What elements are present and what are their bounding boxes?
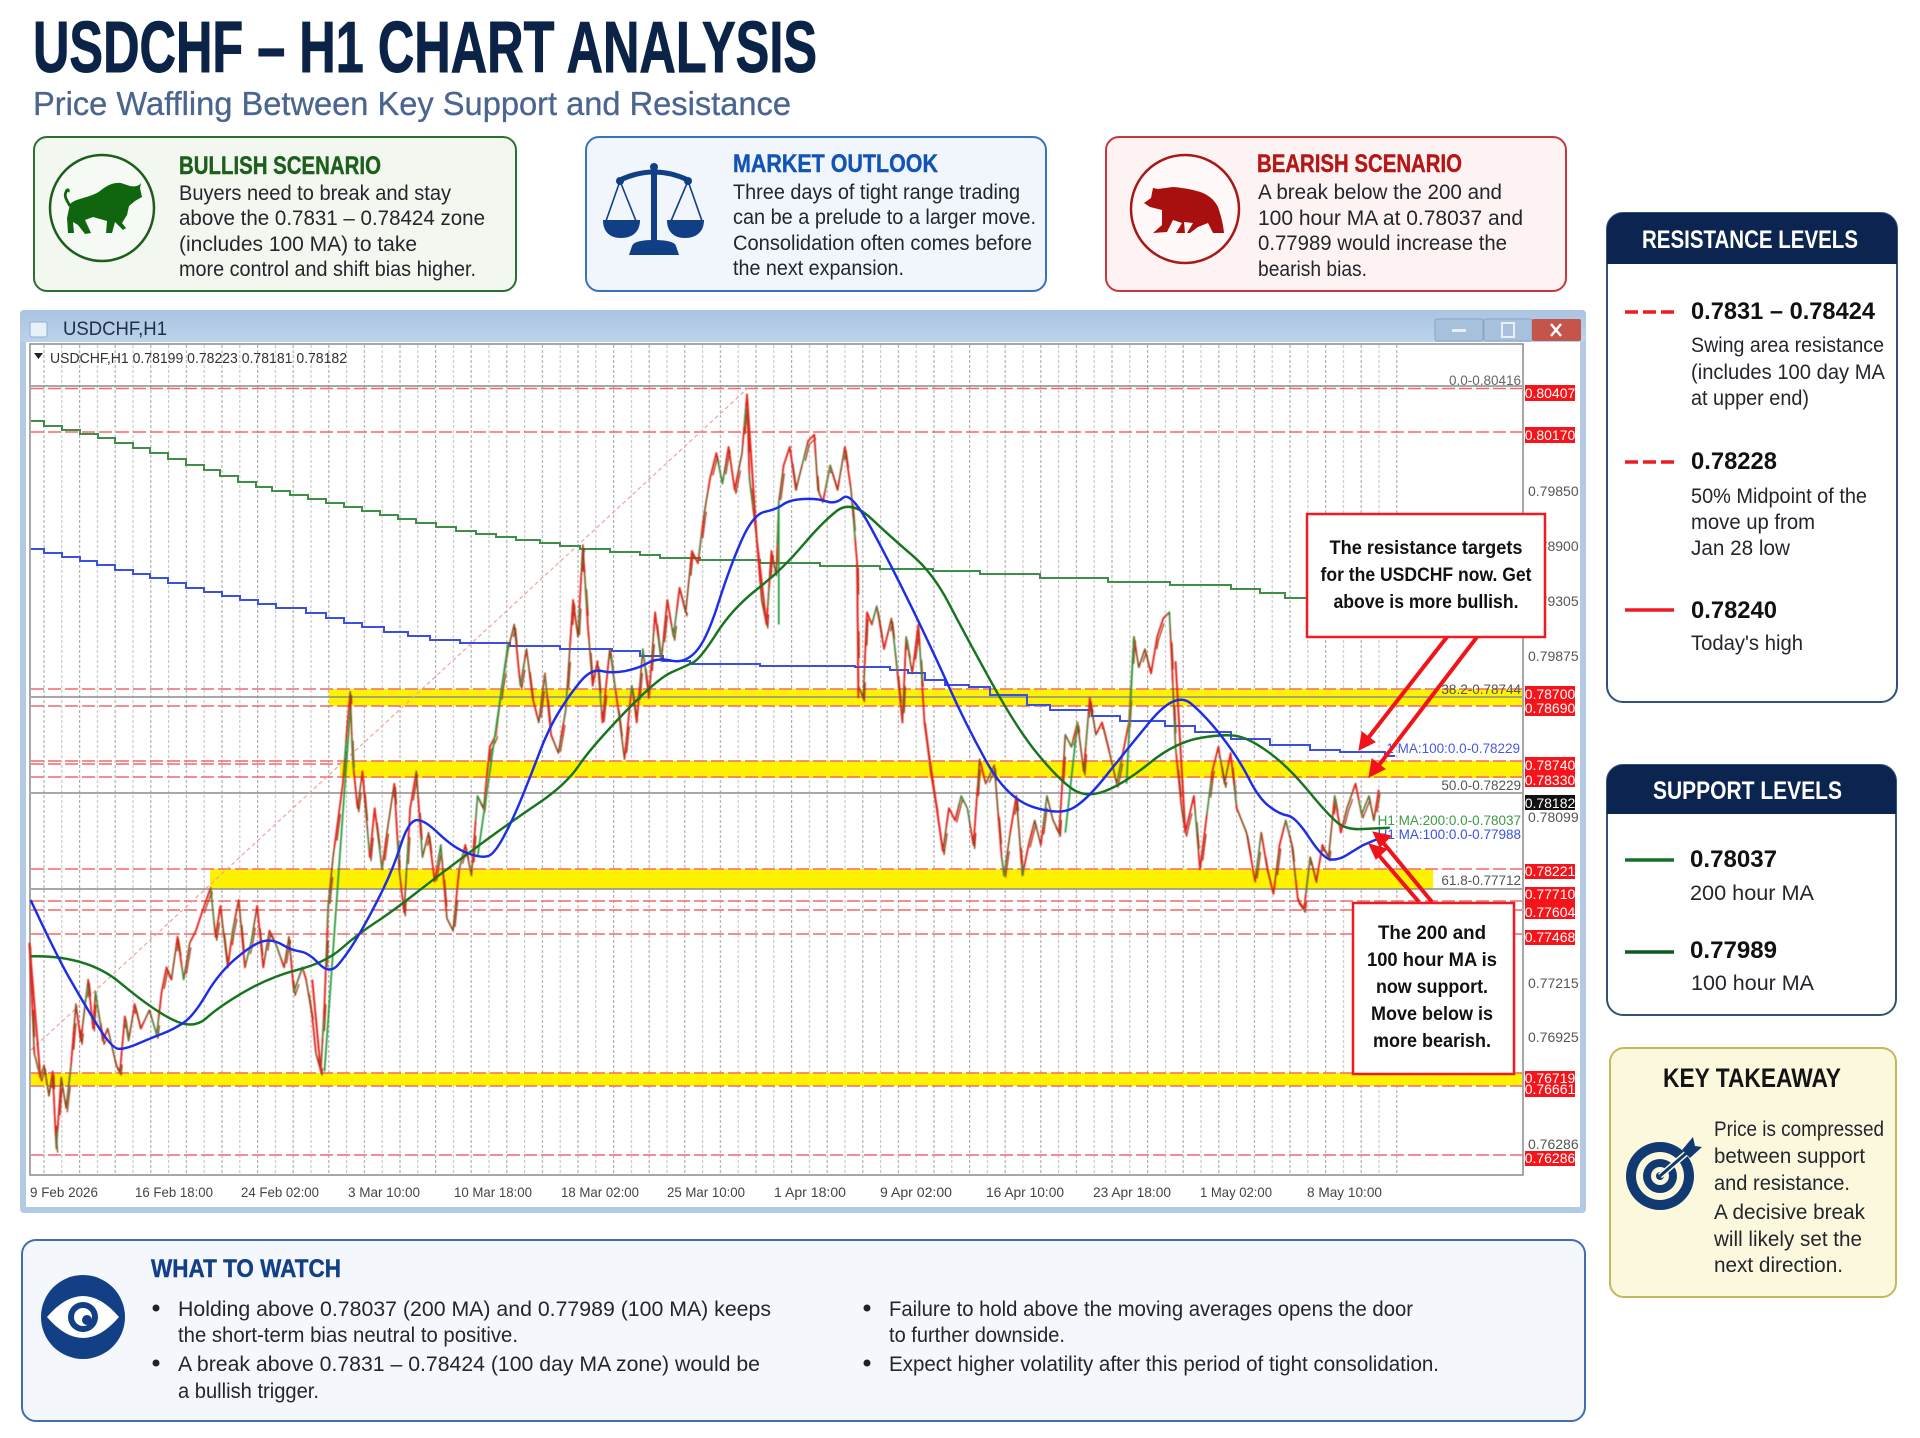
text: bullish body: more control and shift bias higher. — [179, 258, 476, 281]
price axis: 0.76286 — [1525, 1150, 1576, 1166]
text: key takeaway body: between support — [1714, 1145, 1865, 1168]
callout: moving average support — [1353, 903, 1514, 1074]
text: watch list right: Failure to hold above the moving averages opens the door — [889, 1298, 1413, 1321]
level: 0.78240: Today's high — [1691, 632, 1803, 655]
price axis: 0.79850 — [1528, 483, 1579, 499]
text: key takeaway body: and resistance. — [1714, 1172, 1850, 1195]
heading: bearish scenario: BEARISH SCENARIO — [1257, 150, 1462, 178]
chart legend: USDCHF,H1 0.78199 0.78223 0.78181 0.78182 — [50, 350, 347, 367]
text: bullish body: above the 0.7831 – 0.78424 zone — [179, 207, 485, 230]
callout: moving average support: The 200 and — [1378, 923, 1486, 944]
price axis: 0.78900 — [1528, 538, 1579, 554]
level: 0.77989: 0.77989 — [1690, 937, 1777, 964]
price axis: 0.79305 — [1528, 593, 1579, 609]
date axis: 16 Apr 10:00 — [986, 1184, 1064, 1200]
fib and MA labels: H1 MA:200:0.0-0.78037 — [1378, 813, 1521, 828]
level: 0.78037: 200 hour MA — [1690, 882, 1814, 905]
price candles — [29, 394, 1380, 1152]
arrows: moving average support — [1369, 832, 1432, 902]
icon: scales — [603, 163, 704, 255]
fib and MA labels: 1 MA:100:0.0-0.78229 — [1386, 741, 1520, 756]
heading: market outlook: MARKET OUTLOOK — [733, 150, 938, 178]
date axis: 24 Feb 02:00 — [241, 1184, 319, 1200]
level: 0.78037 — [1625, 846, 1814, 905]
text: key takeaway body: next direction. — [1714, 1254, 1843, 1277]
price axis: 0.76925 — [1528, 1029, 1579, 1045]
text: market outlook body — [733, 181, 1036, 280]
dashed level lines — [31, 388, 1522, 1155]
level: 0.7831 – 0.78424: (includes 100 day MA — [1691, 361, 1885, 384]
header: support levels — [1607, 765, 1896, 814]
panel: bullish scenario — [34, 137, 516, 291]
callout: moving average support: 100 hour MA is — [1367, 950, 1497, 971]
heading: what to watch: WHAT TO WATCH — [151, 1255, 341, 1283]
gray fibonacci lines — [31, 386, 1522, 889]
text: key takeaway body — [1713, 1118, 1884, 1277]
arrows: resistance targets — [1359, 637, 1477, 777]
price axis: 0.79875 — [1528, 648, 1579, 664]
date axis: 10 Mar 18:00 — [454, 1184, 532, 1200]
level: 0.77989: 100 hour MA — [1691, 972, 1814, 995]
level: 0.78240 — [1625, 597, 1803, 655]
date axis: 1 Apr 18:00 — [774, 1184, 846, 1200]
text: key takeaway body: Price is compressed — [1714, 1118, 1884, 1141]
long moving averages — [31, 421, 1306, 598]
text: market outlook body: the next expansion. — [733, 257, 904, 280]
price axis: 0.77710 — [1525, 886, 1576, 902]
price axis: 0.78330 — [1525, 772, 1576, 788]
price axis: 0.78740 — [1525, 757, 1576, 773]
window frame — [20, 310, 1586, 1213]
text: watch list left: a bullish trigger. — [178, 1380, 319, 1403]
price axis — [1525, 385, 1579, 1166]
date axis: 9 Feb 2026 — [30, 1184, 98, 1200]
heading: bullish scenario: BULLISH SCENARIO — [179, 152, 381, 180]
yellow support and resistance bands — [31, 689, 1522, 1086]
text: bullish body — [179, 182, 485, 281]
panel: what to watch — [22, 1240, 1585, 1421]
text: key takeaway body: A decisive break — [1714, 1201, 1865, 1224]
callout: moving average support: Move below is — [1371, 1004, 1493, 1025]
date axis: 8 May 10:00 — [1307, 1184, 1382, 1200]
icon: eye — [41, 1275, 125, 1359]
text: bearish body: A break below the 200 and — [1258, 181, 1502, 204]
level: 0.78240: 0.78240 — [1691, 597, 1777, 624]
date axis: 16 Feb 18:00 — [135, 1184, 213, 1200]
fib and MA labels: 0.0-0.80416 — [1449, 373, 1521, 388]
text: market outlook body: Three days of tight range trading — [733, 181, 1020, 204]
price axis: 0.78221 — [1525, 863, 1576, 879]
text: bearish body: 100 hour MA at 0.78037 and — [1258, 207, 1523, 230]
icon: target — [1626, 1137, 1702, 1210]
icon: bull — [50, 155, 154, 261]
panel: support levels — [1607, 765, 1896, 1015]
text: watch list right: to further downside. — [889, 1324, 1065, 1347]
text: bearish body: 0.77989 would increase the — [1258, 232, 1507, 255]
fast moving averages — [31, 497, 1390, 1049]
panel: resistance levels — [1607, 213, 1897, 702]
price axis: 0.77604 — [1525, 904, 1576, 920]
text: bearish body: bearish bias. — [1258, 258, 1367, 281]
date axis: 1 May 02:00 — [1200, 1184, 1272, 1200]
chart plot — [29, 344, 1523, 1175]
level: 0.7831 – 0.78424: Swing area resistance — [1691, 334, 1884, 357]
price axis: 0.80407 — [1525, 385, 1576, 401]
date axis: 18 Mar 02:00 — [561, 1184, 639, 1200]
price axis: 0.77215 — [1528, 975, 1579, 991]
date axis: 25 Mar 10:00 — [667, 1184, 745, 1200]
text: watch list left: A break above 0.7831 – 0.78424 (100 day MA zone) would be — [178, 1353, 760, 1376]
date axis: 23 Apr 18:00 — [1093, 1184, 1171, 1200]
panel: key takeaway — [1610, 1048, 1896, 1297]
date axis: 3 Mar 10:00 — [348, 1184, 420, 1200]
level: 0.78228: 0.78228 — [1691, 448, 1777, 475]
level: 0.78037: 0.78037 — [1690, 846, 1777, 873]
header: resistance levels — [1607, 213, 1897, 264]
price axis: 0.78690 — [1525, 700, 1576, 716]
level: 0.77989 — [1625, 937, 1814, 995]
title bar: USDCHF,H1 — [63, 319, 167, 340]
panel: bearish scenario — [1106, 137, 1566, 291]
panel: chart window — [20, 310, 1586, 1213]
callout: resistance targets: above is more bullish. — [1334, 592, 1518, 613]
text: watch list right: Expect higher volatility after this period of tight consolidation. — [889, 1353, 1439, 1376]
panel: market outlook — [586, 137, 1046, 291]
text: watch list right — [864, 1298, 1439, 1376]
text: watch list left — [152, 1298, 771, 1403]
text: watch list left: the short-term bias neutral to positive. — [178, 1324, 518, 1347]
callout: resistance targets — [1307, 514, 1545, 637]
level: 0.7831 – 0.78424 — [1625, 298, 1885, 410]
price axis: 0.80170 — [1525, 427, 1576, 443]
date axis: 9 Apr 02:00 — [880, 1184, 952, 1200]
heading: key takeaway: KEY TAKEAWAY — [1663, 1063, 1841, 1093]
callout: moving average support: more bearish. — [1373, 1031, 1491, 1052]
price axis: 0.78182 — [1525, 795, 1576, 811]
price axis: 0.78700 — [1525, 686, 1576, 702]
price axis: 0.76661 — [1525, 1081, 1576, 1097]
callout: resistance targets: for the USDCHF now. Get — [1320, 565, 1532, 586]
title: USDCHF – H1 CHART ANALYSIS — [33, 8, 817, 88]
price axis: 0.76719 — [1525, 1070, 1576, 1086]
level: 0.7831 – 0.78424: at upper end) — [1691, 387, 1809, 410]
text: watch list left: Holding above 0.78037 (200 MA) and 0.77989 (100 MA) keeps — [178, 1298, 771, 1321]
header: support levels: SUPPORT LEVELS — [1653, 777, 1842, 805]
text: market outlook body: can be a prelude to a larger move. — [733, 206, 1036, 229]
fib and MA labels: 38.2-0.78744 — [1441, 682, 1521, 697]
price axis: 0.77468 — [1525, 929, 1576, 945]
callout: resistance targets: The resistance targets — [1330, 538, 1522, 559]
text: market outlook body: Consolidation often comes before — [733, 232, 1032, 255]
header: resistance levels: RESISTANCE LEVELS — [1642, 226, 1858, 254]
price axis: 0.76286 — [1528, 1136, 1579, 1152]
fib and MA labels: 50.0-0.78229 — [1441, 778, 1521, 793]
icon: bear — [1131, 155, 1239, 263]
subtitle: Price Waffling Between Key Support and Resistance — [33, 85, 791, 122]
text: key takeaway body: will likely set the — [1713, 1228, 1862, 1251]
level: 0.7831 – 0.78424: 0.7831 – 0.78424 — [1691, 298, 1876, 325]
price axis: 0.78099 — [1528, 809, 1579, 825]
text: bullish body: Buyers need to break and stay — [179, 182, 451, 205]
fib and MA labels: 61.8-0.77712 — [1441, 873, 1521, 888]
level: 0.78228 — [1625, 448, 1867, 560]
level: 0.78228: move up from — [1691, 511, 1815, 534]
text: bearish body — [1258, 181, 1523, 281]
level: 0.78228: 50% Midpoint of the — [1691, 485, 1867, 508]
fib and MA labels — [1378, 373, 1521, 888]
date axis — [30, 1184, 1382, 1200]
fib and MA labels: H1 MA:100:0.0-0.77988 — [1378, 827, 1521, 842]
level: 0.78228: Jan 28 low — [1691, 537, 1791, 560]
title bar — [20, 310, 1586, 342]
callout: moving average support: now support. — [1376, 977, 1488, 998]
text: bullish body: (includes 100 MA) to take — [179, 233, 417, 256]
